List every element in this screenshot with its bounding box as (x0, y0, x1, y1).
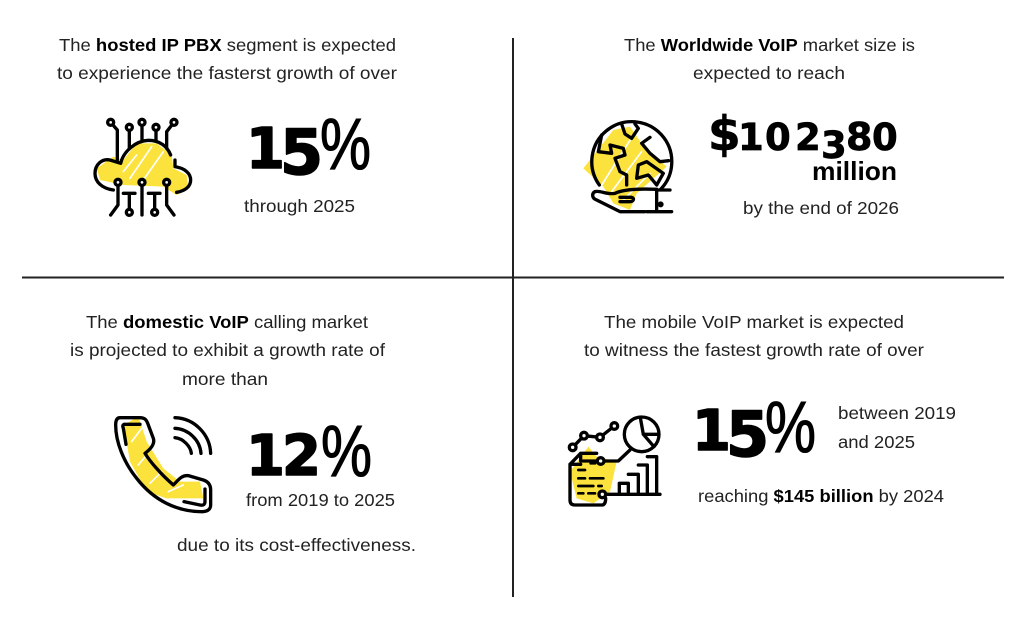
caption: from 2019 to 2025 (246, 490, 395, 510)
intro text: to witness the fastest growth rate of over (584, 340, 924, 360)
intro text: to experience the fasterst growth of over (57, 63, 397, 83)
intro text: more than (182, 369, 268, 389)
stat: $102380: 8 (846, 115, 872, 159)
intro text (57, 35, 397, 83)
stat unit: million: million (812, 156, 897, 186)
stat: 15%: 1 (246, 117, 285, 182)
caption: by the end of 2026 (743, 198, 899, 218)
intro text: expected to reach (693, 63, 845, 83)
stat: 15%: % (765, 388, 816, 468)
intro text: The hosted IP PBX segment is expected (59, 35, 396, 55)
icon: charts and document (569, 417, 660, 505)
intro text: The domestic VoIP calling market (86, 312, 368, 332)
closing text: due to its cost-effectiveness. (177, 535, 416, 555)
intro text: The mobile VoIP market is expected (604, 312, 904, 332)
caption: through 2025 (244, 196, 355, 216)
icon: phone (116, 417, 211, 512)
stat: 15%: 1 (692, 399, 731, 464)
stat: $102380: 0 (765, 116, 791, 159)
side caption (838, 403, 956, 452)
stat: 12%: 2 (282, 424, 321, 489)
stat: $102380: 2 (795, 116, 821, 159)
stat: $102380: 3 (821, 124, 847, 167)
intro text: The Worldwide VoIP market size is (624, 35, 915, 55)
intro text (624, 35, 915, 83)
stat: $102380: 0 (872, 116, 898, 159)
panel: worldwide VoIP (583, 35, 915, 218)
panel: hosted IP PBX (57, 35, 397, 216)
stat: 15%: % (320, 105, 371, 185)
side caption: and 2025 (838, 432, 915, 452)
stat: 12%: 1 (246, 424, 285, 489)
stat: 12% (246, 412, 372, 492)
intro text (584, 312, 924, 360)
panel: domestic VoIP (70, 312, 416, 555)
icon: cloud network (95, 119, 191, 215)
stat: $102380: $ (708, 107, 741, 162)
side caption: between 2019 (838, 403, 956, 423)
stat: 15%: 5 (726, 398, 769, 471)
stat: $102380: 1 (738, 116, 764, 159)
stat: 15% (246, 105, 371, 189)
panel: mobile VoIP (569, 312, 956, 506)
icon: globe in hand (583, 122, 672, 212)
intro text: is projected to exhibit a growth rate of (70, 340, 385, 360)
stat: 12%: % (321, 412, 372, 492)
caption: reaching $145 billion by 2024 (698, 486, 944, 506)
stat: 15% (692, 388, 816, 471)
stat: 15%: 5 (280, 116, 323, 189)
intro text (70, 312, 385, 389)
